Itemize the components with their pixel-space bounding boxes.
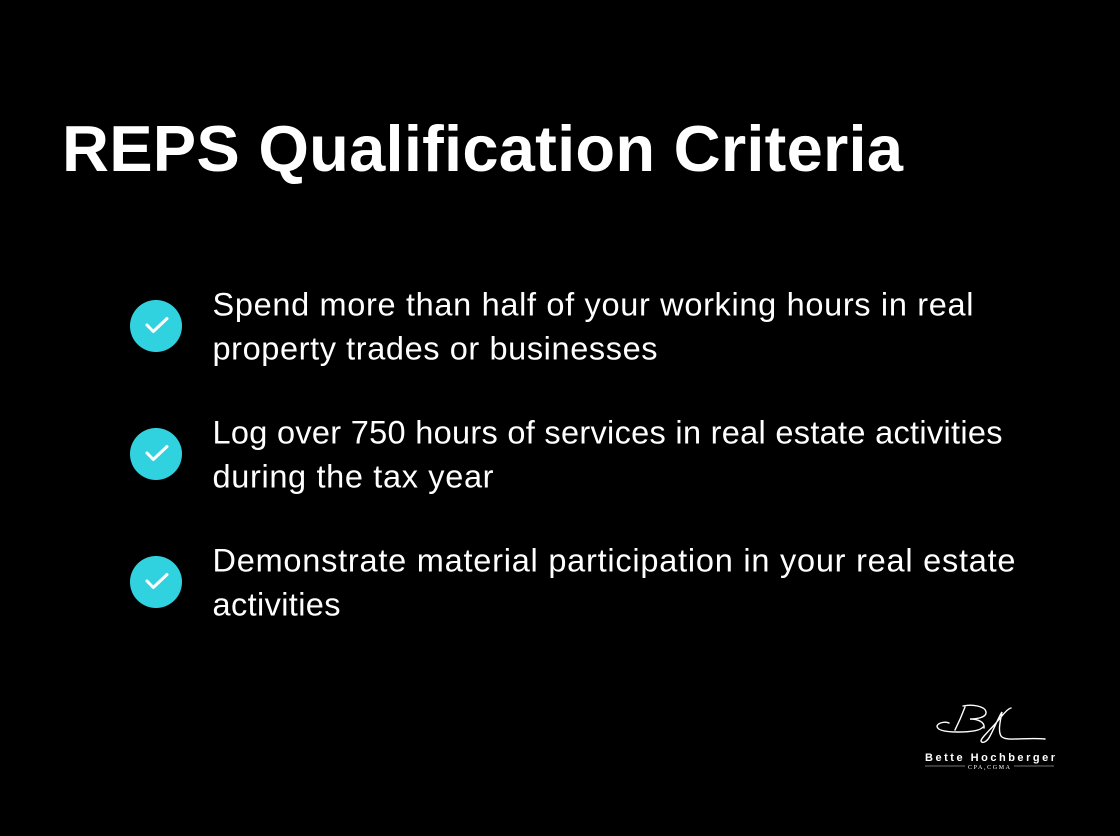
criteria item 1 — [130, 286, 974, 366]
text: working hours: Spend more than half of your working hours in real — [212, 286, 974, 322]
icon: check circle 2 — [130, 428, 182, 480]
logo: Bette Hochberger signature — [925, 705, 1056, 771]
text: material participation: Demonstrate material participation in your real estate — [212, 542, 1016, 578]
text: material participation — [212, 542, 1016, 622]
name: Bette Hochberger — [925, 752, 1056, 764]
credentials: CPA,CGMA — [968, 765, 1011, 771]
text: working hours — [212, 286, 974, 366]
criteria item 3 — [130, 542, 1016, 622]
icon: check circle 1 — [130, 300, 182, 352]
text: working hours: property trades or businesses — [212, 330, 658, 366]
criteria item 2 — [130, 414, 1002, 494]
signature flourish — [937, 705, 1045, 742]
text: material participation: activities — [212, 586, 340, 622]
title: REPS Qualification Criteria — [62, 112, 904, 185]
text: 750 hours — [212, 414, 1002, 494]
text: 750 hours: Log over 750 hours of services in real estate activities — [212, 414, 1002, 450]
text: 750 hours: during the tax year — [212, 458, 494, 494]
icon: check circle 3 — [130, 556, 182, 608]
